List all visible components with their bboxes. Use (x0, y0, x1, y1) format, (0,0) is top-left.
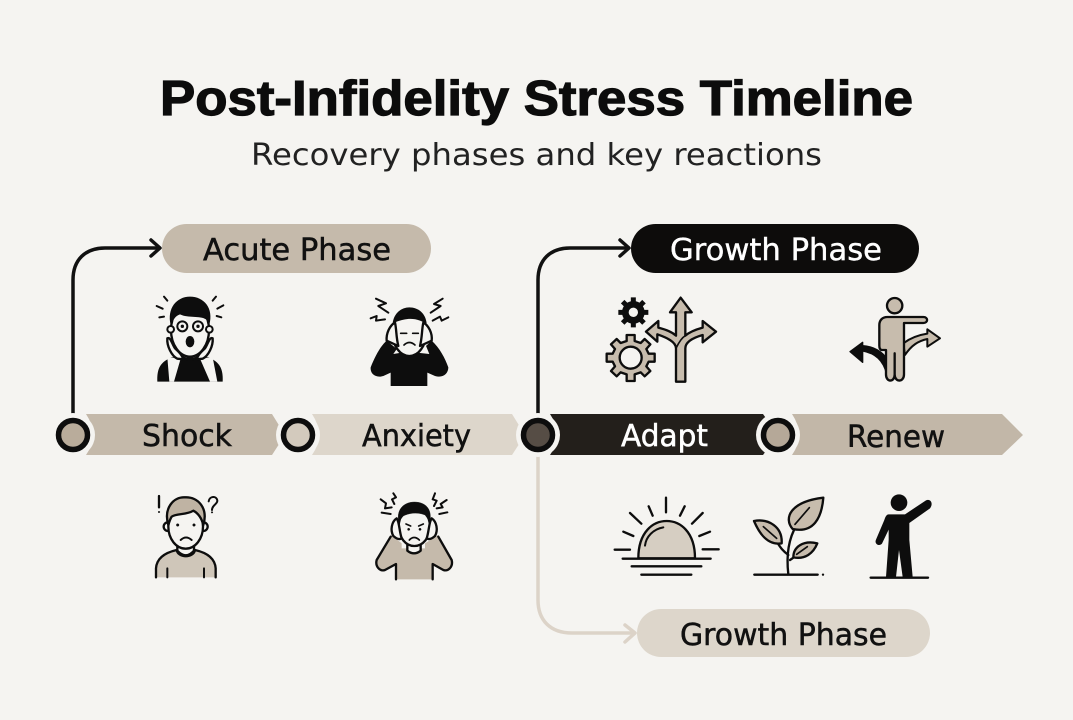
stage: Shock (86, 414, 285, 455)
stage: Renew (792, 414, 1023, 455)
stage: Adapt (550, 414, 778, 455)
pill: Acute Phase (162, 224, 431, 273)
icon: shocked face (157, 297, 223, 382)
stage: Anxiety (312, 414, 525, 455)
icon: confused person (156, 496, 217, 577)
stage: Adapt: Adapt (621, 419, 708, 454)
stage: Renew: Renew (847, 420, 945, 455)
node: Adapt (516, 413, 560, 457)
stage: Anxiety: Anxiety (362, 419, 471, 454)
stage: Shock: Shock (142, 419, 233, 454)
icon: sprout (754, 498, 824, 576)
icon: gears and branching arrows (607, 297, 716, 382)
icon: sunrise (615, 498, 719, 575)
node: Shock (51, 413, 95, 457)
arrow: adapt node to lower growth phase (538, 445, 635, 642)
pill: Growth Phase dark: Growth Phase (670, 233, 882, 268)
icon: anxious person light (376, 493, 452, 579)
arrow: shock node to acute phase (73, 240, 160, 425)
subtitle: Recovery phases and key reactions (251, 138, 822, 173)
node: Renew (756, 413, 800, 457)
pill: Growth Phase light (637, 609, 930, 657)
node: Anxiety (276, 413, 320, 457)
icon: anxious person dark (371, 299, 448, 386)
pill: Growth Phase light: Growth Phase (680, 618, 887, 653)
pill: Growth Phase dark (631, 224, 919, 273)
title: Post-Infidelity Stress Timeline (160, 72, 913, 126)
arrow: adapt node to growth phase (538, 240, 629, 425)
icon: person reaching up (871, 494, 932, 578)
pill: Acute Phase: Acute Phase (203, 233, 391, 268)
icon: person at crossroads (850, 298, 940, 381)
